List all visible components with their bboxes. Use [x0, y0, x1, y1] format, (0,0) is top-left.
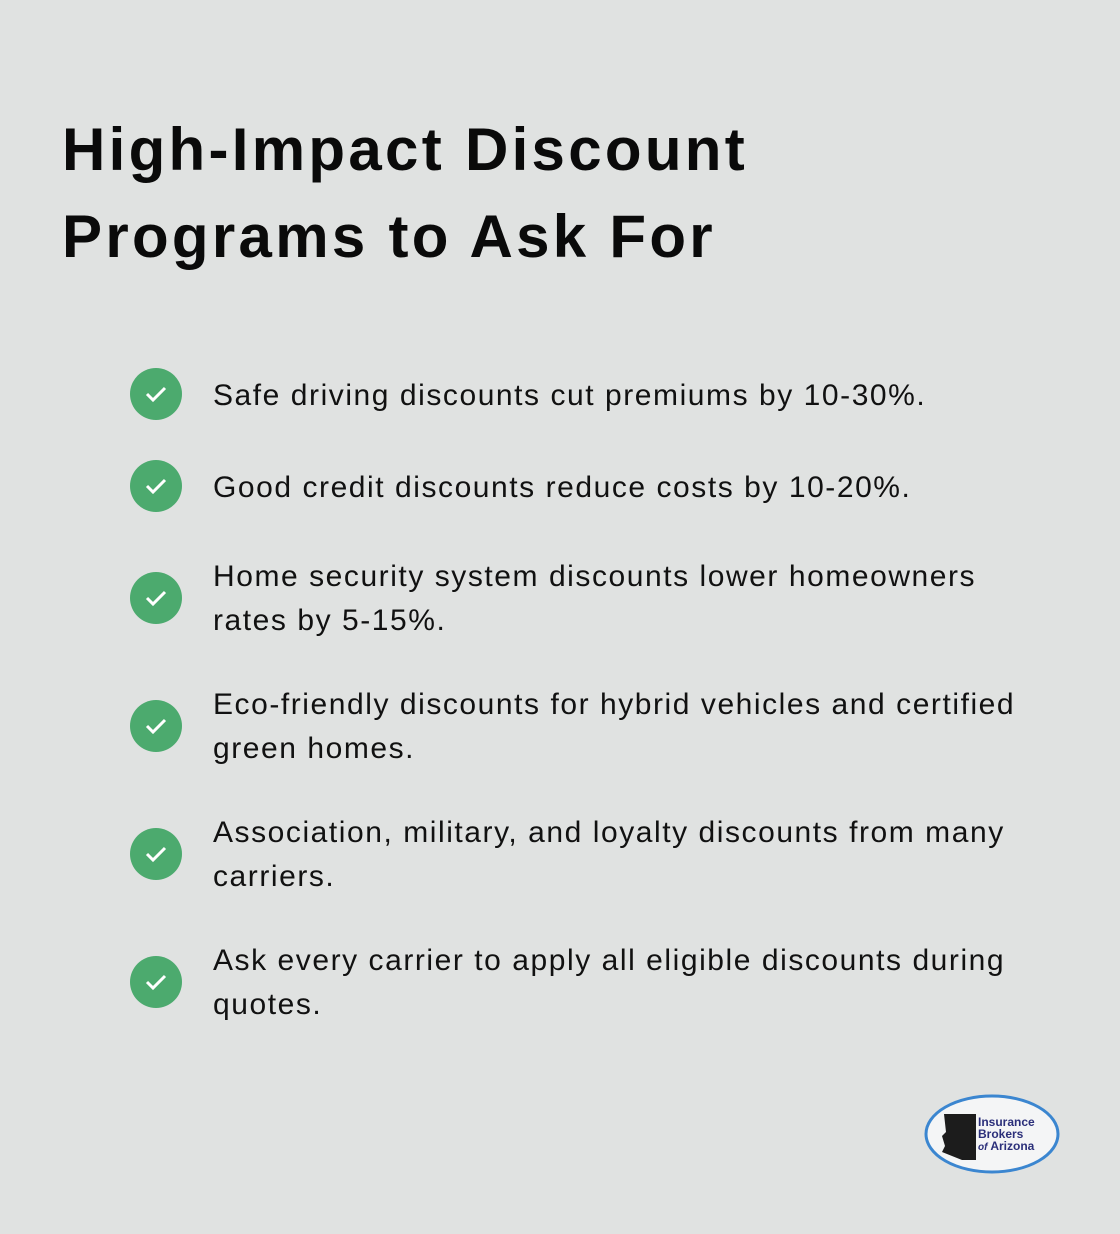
logo — [924, 1094, 1060, 1174]
item: ask every carrier: Ask every carrier to apply all eligible discounts during — [213, 944, 1005, 977]
item: ask every carrier — [130, 944, 1005, 1021]
item: eco-friendly: Eco-friendly discounts for hybrid vehicles and certified — [213, 688, 1015, 721]
item: association — [130, 816, 1005, 893]
logo: Brokers — [978, 1127, 1024, 1141]
item: home security: Home security system discounts lower homeowners — [213, 560, 976, 593]
item: home security: rates by 5-15%. — [213, 604, 446, 637]
logo: Insurance — [978, 1115, 1035, 1129]
item: home security — [130, 560, 976, 637]
item: good credit — [130, 460, 911, 512]
item: eco-friendly: green homes. — [213, 732, 415, 765]
item: association: carriers. — [213, 860, 335, 893]
item: ask every carrier: quotes. — [213, 988, 322, 1021]
logo: of Arizona — [978, 1139, 1035, 1153]
title — [62, 116, 748, 270]
item: association: Association, military, and loyalty discounts from many — [213, 816, 1005, 849]
title: High-Impact Discount — [62, 116, 748, 183]
item: safe driving: Safe driving discounts cut premiums by 10-30%. — [213, 378, 926, 412]
item: good credit: Good credit discounts reduce costs by 10-20%. — [213, 470, 911, 504]
item: eco-friendly — [130, 688, 1015, 765]
title: Programs to Ask For — [62, 203, 716, 270]
item: safe driving — [130, 368, 926, 420]
